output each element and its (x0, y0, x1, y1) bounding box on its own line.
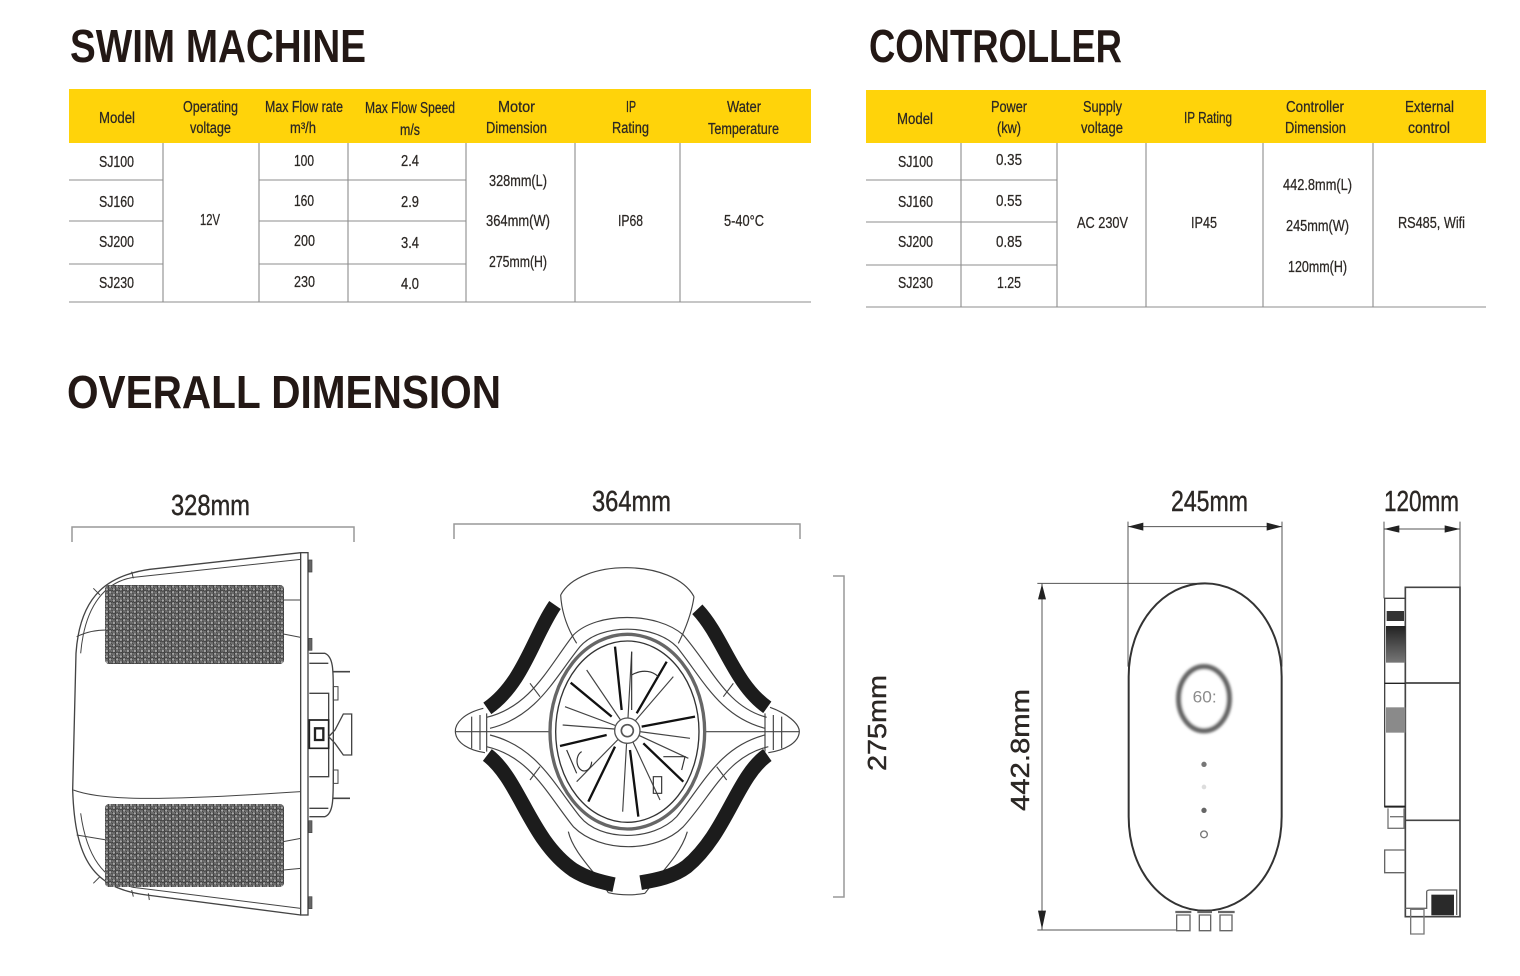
mesh panel upper (105, 585, 284, 664)
hub (615, 718, 640, 743)
main housing (1385, 587, 1460, 934)
controller table header labels: control (1408, 120, 1450, 137)
cable gland block (1431, 895, 1454, 915)
label: 442.8mm: 442.8mm (1005, 689, 1035, 811)
table header labels: IP (626, 99, 636, 116)
table header labels: m/s (400, 122, 420, 139)
vent block lower (1386, 707, 1405, 733)
black strip bottom left (487, 755, 614, 885)
label: 245mm: 245mm (1171, 486, 1248, 518)
table body values: SJ200 (99, 234, 134, 251)
label: 328mm: 328mm (171, 490, 250, 522)
black strip bottom right (641, 755, 767, 883)
table body values (99, 153, 764, 293)
rear motor assembly (309, 653, 352, 817)
controller table body values: 245mm(W) (1286, 218, 1349, 235)
controller table header labels: voltage (1081, 120, 1123, 137)
table body values: SJ230 (99, 275, 134, 292)
bracket: motor width (454, 524, 800, 539)
label: 275mm: 275mm (862, 675, 892, 771)
controller table body values: 442.8mm(L) (1283, 177, 1352, 194)
bracket: motor length (72, 527, 354, 542)
machine body outline (73, 553, 312, 915)
impeller ring (550, 634, 705, 829)
table body values: 364mm(W) (486, 213, 550, 230)
table body values: 2.9 (401, 194, 419, 211)
controller table body values: 0.55 (996, 193, 1022, 210)
table body values: 12V (200, 212, 220, 229)
controller table body values: SJ100 (898, 154, 933, 171)
controller table header labels: Dimension (1285, 120, 1346, 137)
table header labels (99, 99, 779, 139)
controller table body values: 120mm(H) (1288, 259, 1347, 276)
table body values: 328mm(L) (489, 173, 547, 190)
table: swim machine specifications (69, 89, 811, 302)
table body values: SJ100 (99, 154, 134, 171)
table body values: 200 (294, 233, 315, 250)
black strip top left (487, 605, 555, 708)
mesh panel lower (105, 804, 284, 887)
controller table body values (898, 152, 1465, 292)
table header labels: Rating (612, 120, 649, 137)
title: swim machine: SWIM MACHINE (70, 20, 366, 72)
drawing: controller front view (1037, 522, 1282, 931)
table header labels: Max Flow Speed (365, 100, 455, 117)
table body values: 5-40°C (724, 213, 764, 230)
dimension arrows (1037, 522, 1282, 930)
controller table body values: 1.25 (997, 275, 1021, 292)
thin spokes (563, 652, 690, 812)
controller table header labels: Supply (1083, 99, 1122, 116)
display reading: 60: (1193, 688, 1217, 707)
table body values: 3.4 (401, 235, 419, 252)
controller table body values: 0.85 (996, 234, 1022, 251)
drawing: swim machine front view (455, 568, 799, 895)
controller table body values: IP45 (1191, 215, 1217, 232)
table body values: 100 (294, 153, 314, 170)
table body values: SJ160 (99, 194, 134, 211)
outer shell lines (455, 568, 799, 895)
table header labels: m³/h (290, 120, 316, 137)
drawing: controller side view (1384, 522, 1460, 934)
controller table body values: SJ230 (898, 275, 933, 292)
controller table header background (866, 90, 1486, 143)
table body values: 230 (294, 274, 315, 291)
table body values: 160 (294, 193, 314, 210)
controller table body values: SJ160 (898, 194, 933, 211)
table header labels: voltage (190, 120, 231, 137)
controller table body values: AC 230V (1077, 215, 1129, 232)
thick spokes (560, 647, 695, 817)
controller table header labels: External (1405, 99, 1454, 116)
drawing: swim machine side view (73, 553, 352, 915)
table header labels: Operating (183, 99, 238, 116)
table body values: 2.4 (401, 153, 419, 170)
title: overall dimension: OVERALL DIMENSION (67, 366, 501, 418)
table header labels: Water (727, 99, 761, 116)
label: 120mm: 120mm (1384, 486, 1459, 518)
table body values: 4.0 (401, 276, 419, 293)
controller body (1129, 583, 1282, 911)
controller table body values: RS485, Wifi (1398, 215, 1465, 232)
table header labels: Dimension (486, 120, 547, 137)
table body values: IP68 (618, 213, 643, 230)
label: 364mm: 364mm (592, 486, 671, 518)
table body values: 275mm(H) (489, 254, 547, 271)
title: controller: CONTROLLER (869, 20, 1122, 72)
vent block upper (1387, 611, 1404, 621)
controller table header labels: Model (897, 111, 933, 128)
table: controller specifications (866, 90, 1486, 307)
controller table header labels (897, 99, 1454, 137)
controller table header labels: IP Rating (1184, 110, 1232, 127)
table header labels: Motor (498, 99, 535, 116)
controller table body values: 0.35 (996, 152, 1022, 169)
vent block middle (1386, 626, 1405, 663)
controller table grid lines (866, 143, 1486, 307)
dimension arrows (1384, 522, 1460, 598)
controller table body values: SJ200 (898, 234, 933, 251)
display ring (1179, 667, 1229, 731)
table header labels: Temperature (708, 121, 779, 138)
controller table header labels: Power (991, 99, 1027, 116)
inner detail marks (567, 652, 685, 793)
table grid lines (69, 143, 811, 302)
table header background (69, 89, 811, 143)
table header labels: Max Flow rate (265, 99, 343, 116)
bracket: motor height (833, 576, 844, 897)
status indicators (1201, 762, 1207, 838)
bottom connectors (1175, 912, 1235, 931)
controller table header labels: (kw) (997, 120, 1021, 137)
table header labels: Model (99, 110, 135, 127)
black strip top right (697, 609, 767, 707)
controller table header labels: Controller (1286, 99, 1344, 116)
